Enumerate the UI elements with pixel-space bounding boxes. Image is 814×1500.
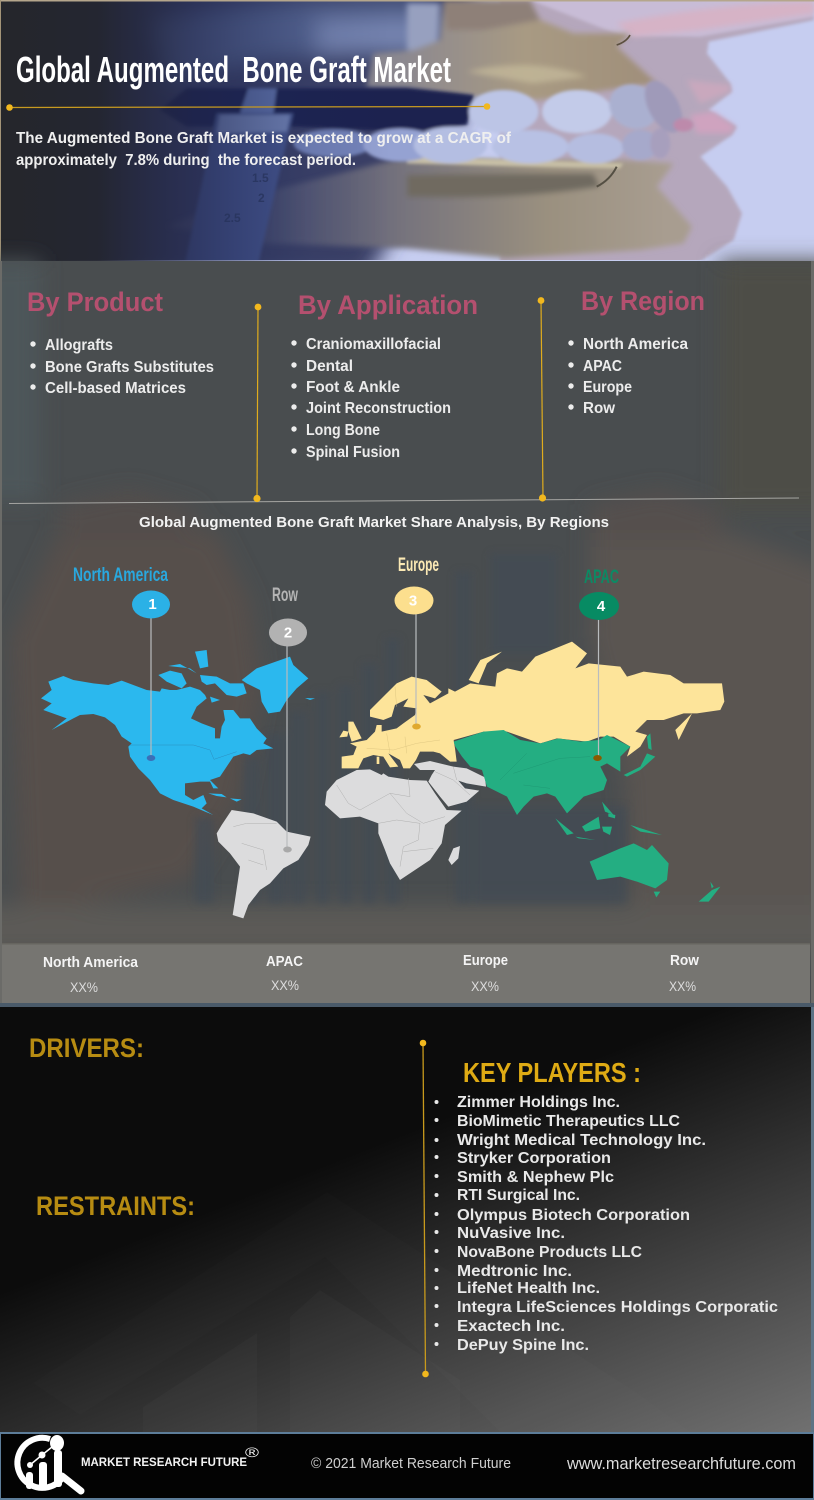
list: key players: Integra LifeSciences Holdings Corporatic [457,1299,778,1316]
list: key players: RTI Surgical Inc. [457,1187,580,1204]
list: applications: Craniomaxillofacial [306,336,441,353]
label: APAC: APAC [584,567,619,588]
label: North America: North America [73,565,168,586]
region: North America [41,650,315,815]
label: Europe: Europe [398,555,439,576]
list: applications: Dental [306,358,353,375]
pin 4: APAC [579,592,619,761]
list: applications: Foot & Ankle [306,379,400,396]
syringe scale numbers [224,171,269,225]
list: key players: Zimmer Holdings Inc. [457,1094,620,1111]
panel: regional share table [0,943,814,1007]
list: products: Cell-based Matrices [45,380,186,397]
panel: market segments and map background [0,261,814,1005]
heading: Key Players: KEY PLAYERS : [463,1057,641,1088]
list: key players: Medtronic Inc. [457,1263,572,1280]
column: Row: XX% [669,978,696,994]
syringe scale numbers: 2.5 [224,211,241,225]
list: regions: APAC [583,358,622,375]
column: Europe: Europe [463,953,508,969]
list: products [30,337,214,397]
list: products: Bone Grafts Substitutes [45,359,214,376]
heading: Drivers: DRIVERS: [29,1033,144,1063]
heading: By Product: By Product [27,287,163,317]
column: APAC [266,954,303,993]
list: products: Allografts [45,337,113,354]
brand name [81,1444,260,1469]
list: applications: Joint Reconstruction [306,400,451,417]
region: Row [217,761,486,918]
heading: Restraints: RESTRAINTS: [36,1191,195,1221]
region: APAC [454,730,720,902]
list: key players: Wright Medical Technology Inc. [457,1132,706,1149]
list: key players: LifeNet Health Inc. [457,1280,600,1297]
list: applications: Long Bone [306,422,380,439]
list: applications: Spinal Fusion [306,444,400,461]
divider: header gold line [6,103,490,111]
world map [41,642,724,918]
list: key players: BioMimetic Therapeutics LLC [457,1113,680,1130]
label: Row: Row [272,585,298,606]
website: www.marketresearchfuture.com [566,1454,796,1473]
syringe scale numbers: 1.5 [252,171,269,185]
panel: header image [0,0,814,280]
panel: drivers, restraints and key players background [0,1007,814,1433]
list: regions [568,336,688,417]
list: key players: Olympus Biotech Corporation [457,1207,690,1224]
syringe scale numbers: 2 [258,191,265,205]
pin 2: Row [269,618,307,852]
divider: gold line two [538,297,546,502]
column: Europe: XX% [471,978,499,994]
pin 1: North America: 1 [148,596,157,613]
list: key players: DePuy Spine Inc. [457,1337,589,1354]
column: APAC: APAC [266,954,303,970]
column: North America [43,955,139,995]
region: Europe [339,642,724,768]
intro text [16,130,512,169]
heading: map title: Global Augmented Bone Graft Market Share Analysis, By Regions [139,514,609,531]
list: key players: NovaBone Products LLC [457,1244,642,1261]
pin 1: North America [132,590,170,761]
list: key players [434,1094,778,1354]
title: Global Augmented Bone Graft Market [16,49,451,90]
list: key players: Exactech Inc. [457,1318,565,1335]
footer bar [0,1432,814,1500]
list: key players: Stryker Corporation [457,1150,611,1167]
list: key players: Smith & Nephew Plc [457,1169,614,1186]
intro text: approximately 7.8% during the forecast period. [16,152,356,169]
list: applications [291,336,451,461]
heading: By Application: By Application [298,290,478,320]
brand name: ® [245,1444,260,1460]
list: regions: Row [583,400,616,417]
list: regions: North America [583,336,688,353]
column: North America: XX% [70,979,98,995]
divider: gold line one [253,304,261,502]
column: Row [669,953,700,994]
intro text: The Augmented Bone Graft Market is expected to grow at a CAGR of [16,130,512,147]
brand name: MARKET RESEARCH FUTURE [81,1455,247,1469]
heading: By Region: By Region [581,286,705,316]
column: North America: North America [43,955,139,971]
column: Europe [463,953,508,994]
list: key players: NuVasive Inc. [457,1225,565,1242]
pin 2: Row: 2 [284,624,292,642]
column: Row: Row [670,953,700,969]
pin 3: Europe: 3 [409,592,417,610]
copyright: © 2021 Market Research Future [311,1455,511,1472]
list: regions: Europe [583,379,632,396]
pin 4: APAC: 4 [597,598,606,615]
divider: gold line three [420,1040,429,1377]
pin 3: Europe [394,586,434,730]
column: APAC: XX% [271,977,299,993]
icon: market research future logo [17,1435,81,1491]
